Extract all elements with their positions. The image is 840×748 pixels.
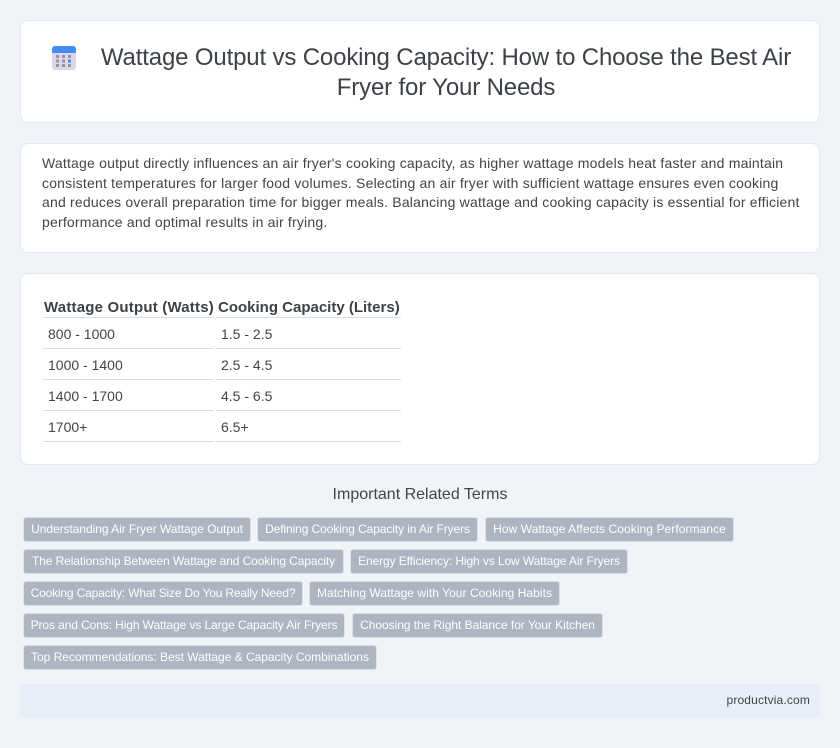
panel: data table: 1.5 - 2.5 [221, 326, 272, 342]
tag: Cooking Capacity: What Size Do You Really Need? [31, 586, 295, 600]
tag: Defining Cooking Capacity in Air Fryers [265, 522, 470, 536]
icon: calendar [52, 46, 76, 70]
panel: data table: 6.5+ [221, 419, 249, 435]
summary text: Wattage output directly influences an air fryer's cooking capacity, as higher wattage models heat faster and maintain [42, 155, 783, 171]
tag: Understanding Air Fryer Wattage Output [31, 522, 243, 536]
title: Wattage Output vs Cooking Capacity: How to Choose the Best Air Fryer for Your Needs [101, 44, 791, 101]
table row 3: 1400 - 1700 [48, 388, 123, 404]
panel: summary [20, 143, 820, 253]
panel: data table: Cooking Capacity (Liters) [218, 299, 400, 316]
panel: data table: 4.5 - 6.5 [221, 388, 272, 404]
tag [350, 549, 628, 574]
summary text [42, 155, 800, 230]
tag: Energy Efficiency: High vs Low Wattage Air Fryers [358, 554, 620, 568]
tag [485, 517, 734, 542]
summary text: and reduces overall preparation time for bigger meals. Balancing wattage and cooking capacity is essential for efficient [42, 194, 800, 210]
tag: Pros and Cons: High Wattage vs Large Capacity Air Fryers [31, 618, 337, 632]
panel: data table: 2.5 - 4.5 [221, 357, 272, 373]
table row 4: 1700+ [48, 419, 87, 435]
tag: How Wattage Affects Cooking Performance [493, 522, 726, 536]
tag [23, 549, 344, 574]
tag [23, 581, 303, 606]
footer bar [20, 684, 820, 718]
tag: Top Recommendations: Best Wattage & Capacity Combinations [31, 650, 369, 664]
tag [309, 581, 560, 606]
footer text: productvia.com [727, 693, 810, 707]
heading: related terms: Important Related Terms [333, 486, 507, 503]
table row 2: 1000 - 1400 [48, 357, 123, 373]
tag [23, 645, 377, 670]
table header: Wattage Output (Watts) [44, 299, 214, 316]
tag [352, 613, 603, 638]
tag: Choosing the Right Balance for Your Kitchen [360, 618, 595, 632]
summary text: consistent temperatures for larger food volumes. Selecting an air fryer with sufficient wattage ensures even cooking [42, 175, 779, 191]
summary text: performance and optimal results in air frying. [42, 214, 327, 230]
tag: The Relationship Between Wattage and Cooking Capacity [32, 554, 335, 568]
tag [23, 517, 251, 542]
table row 1: 800 - 1000 [48, 326, 115, 342]
tag [23, 613, 345, 638]
panel: data table [20, 273, 820, 465]
panel: title card [20, 20, 820, 123]
tag [257, 517, 478, 542]
tags: related terms [23, 517, 734, 670]
tag: Matching Wattage with Your Cooking Habits [317, 586, 552, 600]
